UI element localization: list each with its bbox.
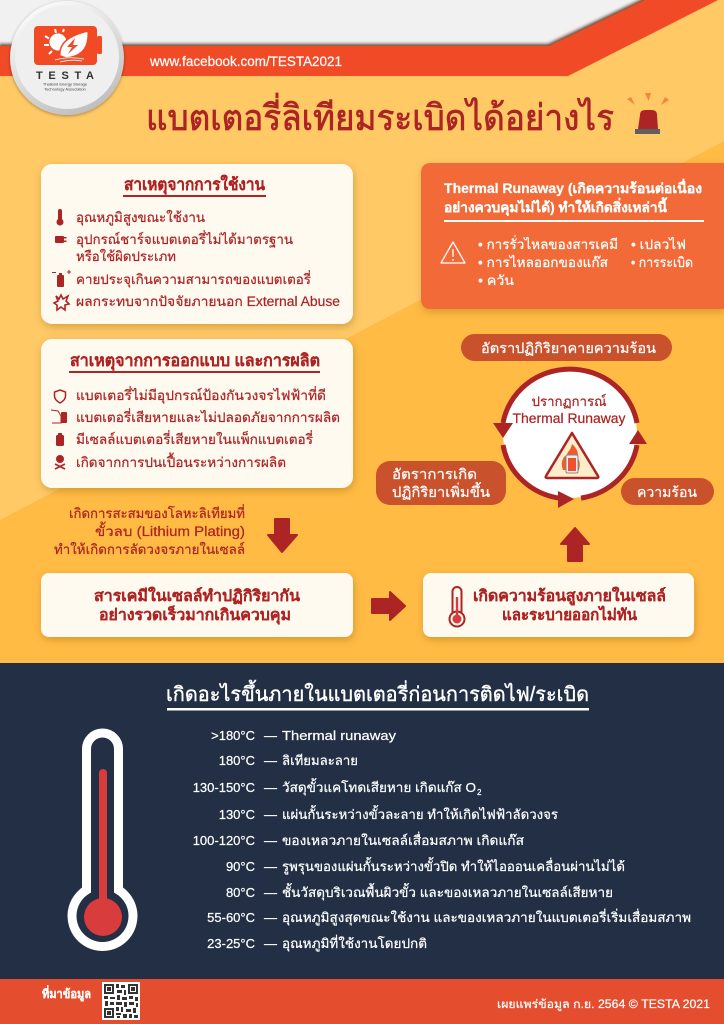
- row 1: Thermal runaway: [282, 728, 397, 743]
- temperature table: [193, 728, 691, 952]
- item: damaged unsafe: แบตเตอรี่เสียหายและไม่ปลอดภัยจากการผลิต: [76, 408, 340, 425]
- text: internal heat: และระบายออกไม่ทัน: [502, 605, 637, 624]
- logo name: TESTA: [36, 70, 94, 82]
- logo tagline: Thailand Energy Storage: [43, 82, 88, 86]
- header band: [0, 0, 718, 76]
- row 7: 80°C: [226, 885, 255, 900]
- row 7: ชั้นวัสดุบริเวณพื้นผิวขั้ว และของเหลวภายในเซลล์เสียหาย: [282, 883, 613, 901]
- row 4: แผ่นกั้นระหว่างขั้วละลาย ทำให้เกิดไฟฟ้าลัดวงจร: [282, 805, 558, 822]
- row 5: [193, 832, 524, 848]
- pill: heat: ความร้อน: [637, 484, 697, 500]
- logo tagline second line: Technology Association: [44, 86, 86, 92]
- row 7: —: [264, 885, 277, 900]
- pill: heat release rate: [461, 334, 672, 361]
- QR code: [102, 982, 140, 1020]
- row 5: 100-120°C: [193, 833, 255, 848]
- text: chemical reaction: [94, 586, 300, 625]
- arrow: up: [561, 528, 589, 561]
- header url: www.facebook.com/TESTA2021: [149, 54, 342, 69]
- row 5: ของเหลวภายในเซลล์เสื่อมสภาพ เกิดแก๊ส: [282, 832, 524, 848]
- panel: internal heat: [423, 573, 694, 637]
- icon: discharge battery: [52, 270, 71, 287]
- text: internal heat: เกิดความร้อนสูงภายในเซลล์: [473, 586, 666, 607]
- row 8: —: [264, 910, 277, 925]
- row 9: [207, 935, 427, 952]
- result list: • การไหลออกของแก๊ส: [478, 255, 608, 270]
- heading: temperature stages: เกิดอะไรขึ้นภายในแบตเตอรี่ก่อนการติดไฟ/ระเบิด: [166, 680, 589, 706]
- row 2: 180°C: [219, 753, 255, 768]
- footer: [0, 979, 724, 1024]
- row 2: [219, 753, 358, 768]
- pill: heat release rate: อัตราปฏิกิริยาคายความร้อน: [481, 340, 656, 356]
- diagram: thermal runaway cycle: [493, 369, 647, 508]
- row 9: 23-25°C: [207, 936, 255, 951]
- row 3: 2: [477, 788, 482, 797]
- result list: • ควัน: [478, 273, 514, 288]
- arrow: down: [268, 519, 297, 552]
- row 9: อุณหภูมิที่ใช้งานโดยปกติ: [282, 935, 427, 952]
- text: lithium plating: ทำให้เกิดการลัดวงจรภายในเซลล์: [54, 541, 245, 557]
- item: contamination: เกิดจากการปนเปื้อนระหว่างการผลิต: [76, 452, 286, 470]
- row 2: ลิเทียมละลาย: [282, 753, 358, 768]
- heading: design causes: สาเหตุจากการออกแบบ และการผลิต: [70, 351, 320, 371]
- source label: ที่มาข้อมูล: [42, 985, 91, 1002]
- row 8: 55-60°C: [207, 910, 255, 925]
- arc arrows: [503, 369, 637, 498]
- item: external abuse: ผลกระทบจากปัจจัยภายนอก External Abuse: [76, 294, 340, 309]
- icon: cell battery: [56, 433, 64, 446]
- row 1: [211, 728, 397, 743]
- row 1: >180°C: [211, 728, 255, 743]
- pill: reaction rate increases: [376, 461, 506, 505]
- arrowheads: [493, 423, 647, 508]
- icon: siren: [627, 93, 669, 134]
- result list: • เปลวไฟ: [631, 237, 686, 252]
- icon: warning triangle: [441, 242, 465, 263]
- panel: temperature stages: [0, 663, 724, 979]
- item: over discharge: คายประจุเกินความสามารถของแบตเตอรี่: [76, 270, 311, 288]
- heading: usage causes: สาเหตุจากการใช้งาน: [124, 174, 266, 195]
- background: [0, 0, 724, 664]
- pill: reaction rate increases: ปฏิกิริยาเพิ่มขึ้น: [392, 482, 490, 500]
- row 1: —: [264, 728, 277, 743]
- row 6: รูพรุนของแผ่นกั้นระหว่างขั้วปิด ทำให้ไอออนเคลื่อนผ่านไม่ได้: [282, 857, 625, 875]
- arrow: right: [372, 592, 405, 620]
- row 4: —: [264, 807, 277, 822]
- row 3: —: [264, 780, 277, 795]
- icon: battery fire warning: [546, 433, 598, 478]
- text: lithium plating: ขั้วลบ (Lithium Plating): [95, 521, 245, 539]
- result list: • การระเบิด: [631, 255, 693, 270]
- panel: thermal runaway results: [421, 163, 724, 309]
- circle title: Thermal Runaway: [512, 411, 626, 426]
- row 3: [193, 778, 482, 797]
- icon: battery sun leaf: [34, 26, 102, 65]
- text: chemical reaction: อย่างรวดเร็วมากเกินควบคุม: [99, 604, 291, 625]
- heading: thermal runaway results: Thermal Runaway (เกิดความร้อนต่อเนื่อง: [444, 178, 702, 196]
- row 8: อุณหภูมิสูงสุดขณะใช้งาน และของเหลวภายในแบตเตอรี่เริ่มเสื่อมสภาพ: [282, 909, 691, 926]
- item: damaged cell: มีเซลล์แบตเตอรี่เสียหายในแพ็กแบตเตอรี่: [76, 430, 313, 447]
- item: non-standard charger: อุปกรณ์ชาร์จแบตเตอรี่ไม่ได้มาตรฐาน: [76, 230, 293, 248]
- result list: [478, 235, 693, 288]
- circle title: [512, 393, 626, 426]
- row 7: [226, 883, 613, 901]
- row 9: —: [264, 936, 277, 951]
- text: lithium plating: เกิดการสะสมของโลหะลิเทียมที่: [69, 504, 245, 521]
- heading: thermal runaway results: [444, 178, 702, 216]
- row 3: 130-150°C: [193, 780, 255, 795]
- icon: thermometer red: [450, 587, 464, 626]
- icon: impact star: [54, 295, 69, 310]
- panel: design and manufacturing causes: [41, 339, 353, 488]
- icon: large thermometer: [72, 733, 133, 946]
- row 4: 130°C: [219, 807, 255, 822]
- icon: thermometer small: [56, 209, 64, 226]
- row 6: 90°C: [226, 859, 255, 874]
- text: lithium plating: [54, 504, 245, 557]
- heading: thermal runaway results: อย่างควบคุมไม่ได้) ทำให้เกิดสิ่งเหล่านี้: [444, 197, 668, 216]
- icon: damaged battery: [51, 410, 67, 423]
- result list: • การรั่วไหลของสารเคมี: [478, 235, 618, 252]
- panel: usage causes: [41, 164, 353, 324]
- row 2: —: [264, 753, 277, 768]
- text: chemical reaction: สารเคมีในเซลล์ทำปฏิกิริยากัน: [94, 586, 300, 605]
- circle title: ปรากฏการณ์: [532, 393, 606, 409]
- pill: reaction rate increases: อัตราการเกิด: [392, 466, 477, 482]
- icon: shield: [54, 390, 66, 403]
- item: non-standard charger: [76, 230, 293, 264]
- logo badge: [10, 1, 124, 115]
- row 5: —: [264, 833, 277, 848]
- row 6: —: [264, 859, 277, 874]
- icon: skull: [55, 455, 65, 469]
- panel: chemical reaction: [41, 573, 353, 637]
- item: high temperature: อุณหภูมิสูงขณะใช้งาน: [76, 209, 205, 226]
- icon: charger: [55, 236, 66, 243]
- publication credit: เผยแพร่ข้อมูล ก.ย. 2564 © TESTA 2021: [497, 998, 710, 1011]
- text: internal heat: [473, 586, 666, 624]
- pill: heat: [621, 478, 714, 505]
- item: non-standard charger: หรือใช้ผิดประเภท: [76, 248, 176, 264]
- row 3: วัสดุขั้วแคโทดเสียหาย เกิดแก๊ส O: [282, 778, 476, 796]
- item: no protection: แบตเตอรี่ไม่มีอุปกรณ์ป้องกันวงจรไฟฟ้าที่ดี: [76, 386, 326, 404]
- title: แบตเตอรี่ลิเทียมระเบิดได้อย่างไร: [146, 93, 614, 138]
